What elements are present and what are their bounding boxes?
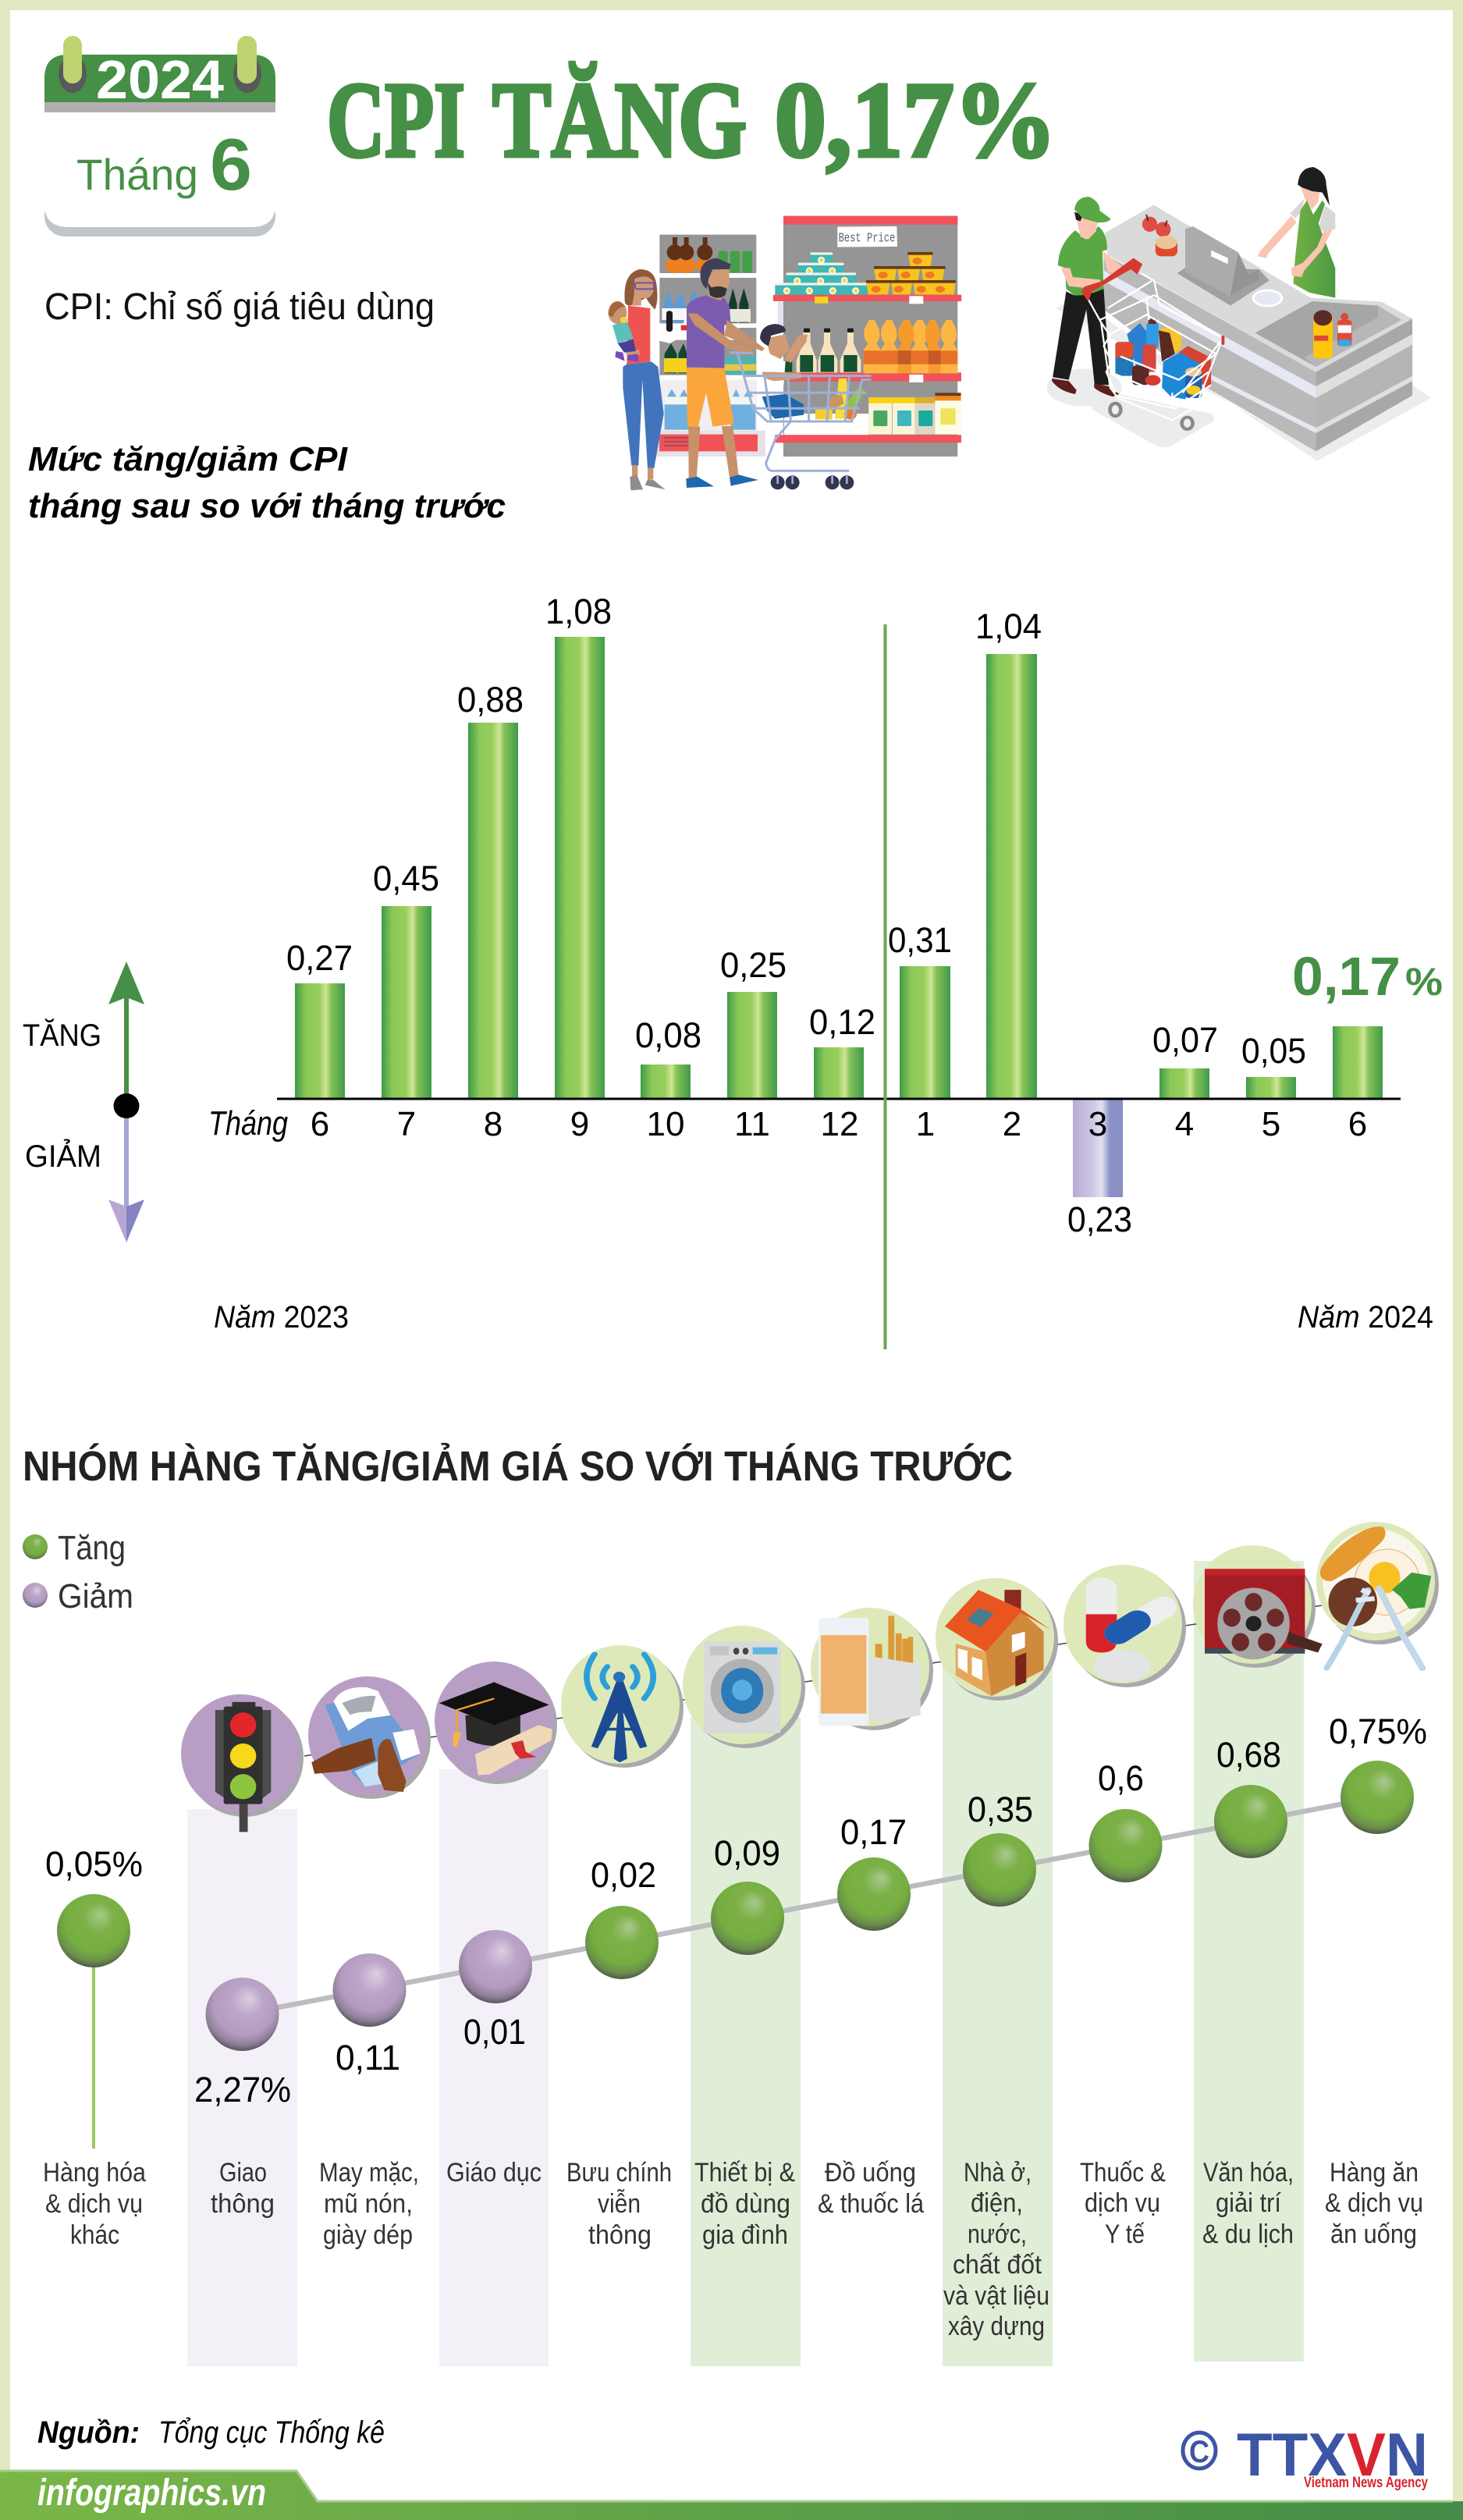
calendar badge: 2024 [96, 49, 224, 110]
bar: 4/2024 [1159, 1068, 1209, 1099]
illustration: cashier counter with customer and cart [1047, 167, 1431, 461]
category labels [43, 2158, 1423, 2341]
icon: clothes and shoes [311, 1687, 420, 1792]
increase/decrease arrows legend [23, 961, 144, 1242]
chart heading [28, 440, 506, 525]
bar value labels: 0,08 [635, 1015, 701, 1055]
dot value labels: 0,6 [1098, 1758, 1144, 1798]
bar value labels: 0,07 [1152, 1020, 1218, 1060]
month axis labels: 5 [1262, 1105, 1280, 1143]
legend: increase / decrease: Giảm [58, 1577, 133, 1615]
person: boy in cart [758, 324, 808, 419]
shopping cart with groceries [730, 353, 872, 489]
products: top-left bottles [650, 237, 756, 430]
dot value labels: 0,02 [591, 1855, 656, 1895]
category labels: Giao [219, 2158, 267, 2188]
calendar badge: Tháng [76, 150, 198, 199]
category labels: Bưu chính [566, 2158, 672, 2188]
title: TĂNG [492, 60, 747, 179]
bar: 2/2024 [986, 654, 1037, 1099]
highlighted value 0,17%: % [1405, 960, 1443, 1004]
dot value labels: 0,09 [714, 1833, 780, 1873]
footer bar with site name [0, 2471, 1463, 2520]
bar: 8/2023 [468, 723, 518, 1099]
dot: education [459, 1930, 532, 2003]
dot value labels: 0,01 [463, 2012, 526, 2052]
category labels: nước, [968, 2220, 1027, 2249]
month axis labels: 7 [397, 1105, 416, 1143]
person: customer man [1052, 197, 1122, 396]
dot line chart: price change by group [45, 1711, 1427, 2149]
dot value labels: 0,35 [968, 1790, 1033, 1829]
floor shadows [1047, 303, 1431, 461]
category labels: khác [70, 2220, 119, 2250]
dot: culture [1214, 1785, 1287, 1858]
logo: TTXVN: TTXVN [1237, 2420, 1428, 2489]
bar: 11/2023 [727, 992, 777, 1099]
logo: TTXVN: C [1189, 2435, 1209, 2469]
increase/decrease arrows legend: GIẢM [25, 1138, 101, 1174]
category labels: và vật liệu [943, 2281, 1049, 2311]
month axis labels: 2 [1003, 1105, 1021, 1143]
bar value labels: 0,05 [1241, 1031, 1306, 1071]
dot: transport [206, 1978, 279, 2051]
bar value labels: 0,25 [720, 945, 787, 985]
month axis labels: 12 [821, 1105, 858, 1143]
month axis labels: Tháng [208, 1104, 288, 1143]
dot: telecom [585, 1906, 659, 1979]
category labels: Giáo dục [446, 2158, 542, 2188]
category labels: dịch vụ [1085, 2188, 1160, 2218]
bar: 6/2023 [295, 983, 345, 1099]
dot value labels: 0,05% [45, 1844, 143, 1884]
sign: best price: Best Price [839, 231, 895, 246]
category labels: đồ dùng [701, 2189, 790, 2219]
bar value labels: 0,88 [457, 680, 524, 720]
products: oil bottles [783, 320, 957, 373]
icon: telecom tower [587, 1655, 653, 1762]
footer bar with site name: infographics.vn [37, 2472, 266, 2514]
bar: 6/2024 [1333, 1026, 1383, 1099]
category labels: & dịch vụ [1325, 2188, 1423, 2218]
icon: medicine capsules [1086, 1578, 1163, 1682]
bar: 5/2024 [1246, 1077, 1296, 1099]
category labels: May mặc, [319, 2158, 419, 2188]
dot value labels: 0,75% [1329, 1711, 1427, 1751]
counter [1104, 205, 1412, 451]
category labels: & dịch vụ [45, 2189, 143, 2219]
dot value labels: 0,68 [1216, 1735, 1281, 1775]
shopping cart frame [1081, 258, 1224, 431]
increase/decrease arrows legend: TĂNG [23, 1018, 101, 1053]
category labels: viễn [598, 2189, 641, 2219]
dot: other goods [57, 1894, 130, 1967]
legend: increase / decrease [23, 1529, 133, 1615]
category labels: thông [588, 2220, 652, 2250]
bar chart: monthly CPI change [208, 592, 1443, 1349]
bar value labels [286, 592, 1306, 1239]
bar: 10/2023 [641, 1065, 691, 1099]
category labels: & du lịch [1202, 2220, 1294, 2249]
dot: household appliances [711, 1882, 784, 1955]
bar value labels: 1,08 [545, 592, 612, 631]
category labels: Thiết bị & [694, 2158, 795, 2188]
icon: traffic light [215, 1702, 271, 1832]
icon: plate of food [1320, 1527, 1431, 1669]
category labels: giải trí [1216, 2188, 1281, 2218]
bar: 9/2023 [555, 637, 605, 1099]
chart heading: tháng sau so với tháng trước [28, 487, 506, 525]
category labels: Đồ uống [825, 2158, 916, 2188]
logo: TTXVN: Vietnam News Agency [1304, 2475, 1428, 2491]
dot: medicine [1089, 1809, 1163, 1882]
dot value labels [45, 1711, 1427, 2109]
icon: juice and cigarettes [818, 1616, 921, 1726]
category labels: giày dép [323, 2220, 413, 2250]
dot: clothing [332, 1953, 406, 2027]
calendar badge [44, 36, 275, 236]
year label 2023: Năm 2023 [214, 1300, 349, 1335]
bar: 3/2024 (decrease) [1073, 1099, 1123, 1197]
cash register [1177, 226, 1283, 307]
chart heading: Mức tăng/giảm CPI [28, 440, 348, 478]
category labels: Hàng hóa [43, 2158, 146, 2188]
counter items [1142, 215, 1352, 358]
products: bottom shelf boxes [868, 393, 961, 435]
bar value labels: 1,04 [975, 606, 1042, 646]
bar: 7/2023 [382, 906, 431, 1099]
category labels: Văn hóa, [1203, 2158, 1294, 2188]
subtitle: CPI definition: CPI: Chỉ số giá tiêu dùng [44, 286, 435, 328]
year label 2024: Năm 2024 [1298, 1300, 1433, 1335]
person: woman holding baby [608, 269, 666, 490]
bar value labels: 0,27 [286, 938, 353, 978]
icon: graduation cap and diploma [439, 1682, 552, 1775]
legend: increase / decrease: Tăng [58, 1529, 126, 1567]
illustration: family shopping at supermarket shelves [608, 216, 961, 490]
category labels: mũ nón, [324, 2189, 413, 2219]
bar value labels: 0,31 [888, 920, 952, 960]
category labels: Hàng ăn [1330, 2158, 1419, 2188]
month axis labels: 1 [916, 1105, 935, 1143]
month axis labels: 11 [734, 1105, 770, 1143]
title: 0,17% [775, 60, 1056, 179]
dot value labels: 2,27% [194, 2070, 291, 2109]
icon: house [945, 1590, 1051, 1696]
bar: 1/2024 [900, 966, 950, 1099]
source note: Nguồn: [37, 2415, 140, 2450]
sign: best price [837, 226, 897, 247]
bar value labels: 0,12 [809, 1002, 875, 1042]
source note: Tổng cục Thống kê [158, 2415, 385, 2450]
back wall shelving [656, 216, 961, 457]
groceries in cart [1115, 318, 1211, 400]
title [327, 60, 1056, 179]
icon: washing machine [704, 1641, 780, 1733]
dot: beverages and tobacco [837, 1857, 911, 1931]
bar value labels: 0,23 [1067, 1200, 1132, 1239]
highlighted value 0,17%: 0,17 [1292, 946, 1401, 1007]
calendar badge: 6 [210, 123, 252, 205]
month axis labels: 9 [570, 1105, 589, 1143]
category labels: Y tế [1105, 2220, 1145, 2249]
category labels: & thuốc lá [818, 2189, 924, 2219]
icon circles [181, 1522, 1439, 1817]
category labels: xây dựng [948, 2312, 1045, 2341]
dot: food [1340, 1761, 1414, 1834]
month axis labels: 3 [1088, 1105, 1107, 1143]
month axis labels [208, 1104, 1367, 1143]
highlight bands behind categories [187, 1561, 1304, 2366]
dot: housing [963, 1833, 1036, 1907]
month axis labels: 8 [484, 1105, 502, 1143]
category labels: Thuốc & [1080, 2158, 1166, 2188]
category labels: Nhà ở, [964, 2158, 1032, 2188]
month axis labels: 10 [647, 1105, 684, 1143]
bar: 12/2023 [814, 1047, 864, 1099]
bar value labels: 0,45 [373, 858, 439, 898]
dot value labels: 0,11 [336, 2038, 400, 2077]
dot value labels: 0,17 [840, 1812, 907, 1852]
person: cashier woman [1258, 167, 1335, 298]
category labels: ăn uống [1330, 2220, 1417, 2249]
category labels: gia đình [702, 2220, 788, 2250]
category labels: chất đốt [953, 2250, 1042, 2280]
section heading: NHÓM HÀNG TĂNG/GIẢM GIÁ SO VỚI THÁNG TRƯỚC [23, 1443, 1013, 1490]
icon: film reel and curtain [1205, 1569, 1323, 1659]
products: stacked cans and tubs [775, 252, 956, 295]
category labels: điện, [971, 2188, 1023, 2218]
month axis labels: 4 [1175, 1105, 1194, 1143]
person: man pushing cart [686, 258, 765, 488]
source note [37, 2415, 385, 2450]
title: CPI [327, 60, 465, 179]
month axis labels: 6 [1348, 1105, 1367, 1143]
month axis labels: 6 [311, 1105, 329, 1143]
category labels: thông [211, 2189, 275, 2219]
